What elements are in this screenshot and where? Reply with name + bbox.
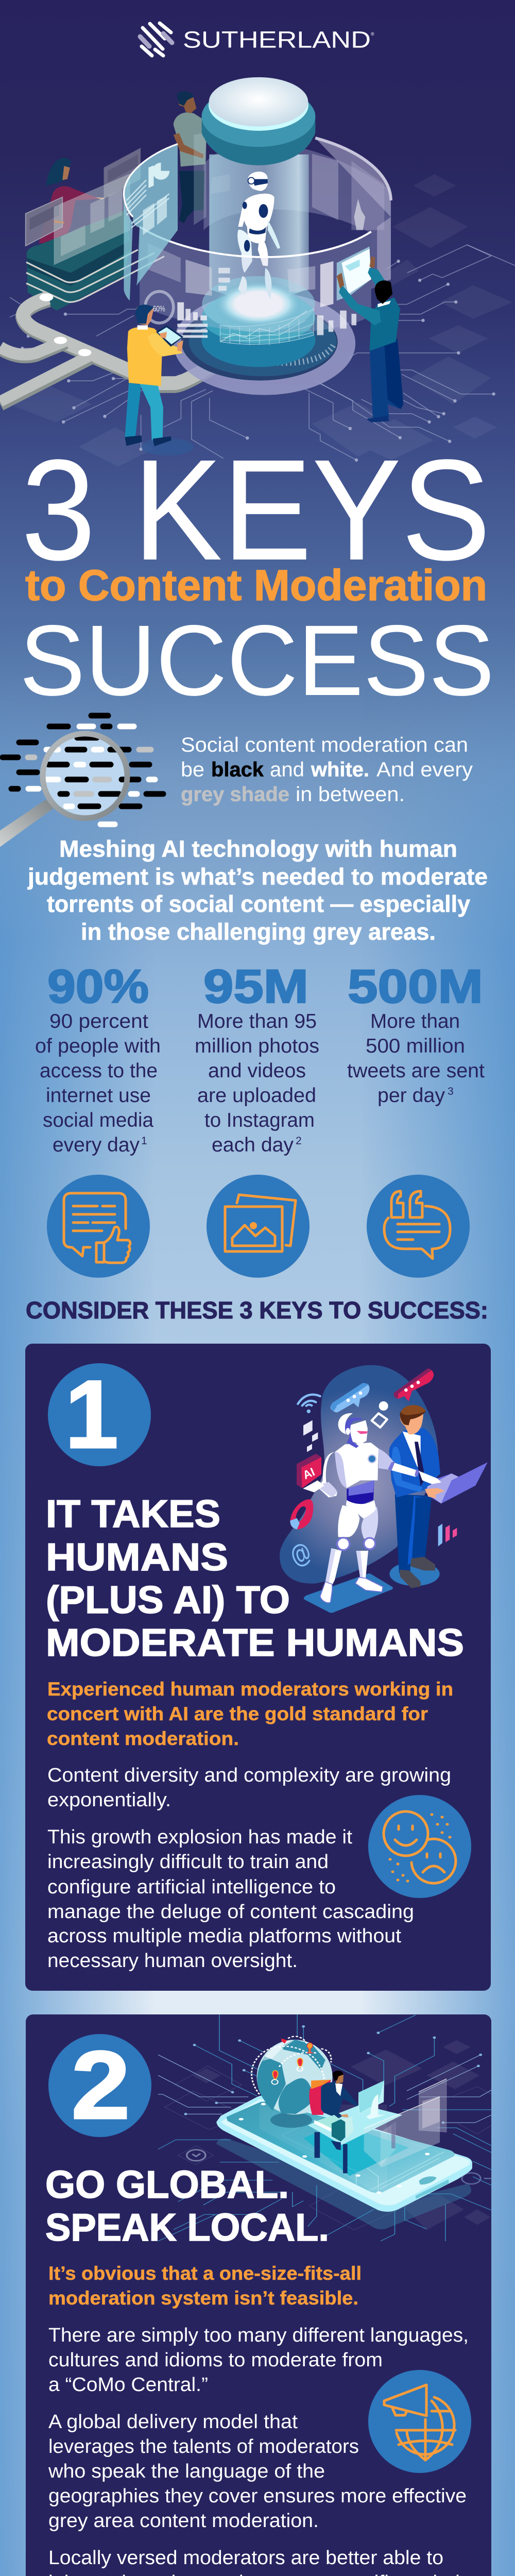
desk and moderator xyxy=(308,2105,402,2145)
stat: 90 percent: social media xyxy=(43,1109,153,1131)
stat: 90 percent: 90% xyxy=(47,960,149,1013)
orange lead text: moderation system isn’t feasible. xyxy=(48,2287,358,2309)
back panel ring xyxy=(203,138,391,289)
text block: meshing AI with human judgement: judgement is what’s needed to moderate xyxy=(27,863,488,890)
heading: SPEAK LOCAL. xyxy=(45,2206,329,2249)
heading: GO GLOBAL. xyxy=(45,2163,289,2206)
stat: 500M: 500 million xyxy=(366,1035,465,1057)
heading: IT TAKES xyxy=(46,1492,220,1535)
body text: configure artificial intelligence to xyxy=(47,1876,336,1898)
stat: 95M: and videos xyxy=(208,1060,306,1082)
stat: 500M: 3 xyxy=(448,1086,454,1097)
robot in cylinder xyxy=(237,172,280,273)
logo: Sutherland: SUTHERLAND xyxy=(183,27,371,53)
circuit background xyxy=(192,2040,490,2230)
body text: across multiple media platforms without xyxy=(47,1925,401,1947)
body text: geographies they cover ensures more effective xyxy=(48,2485,467,2507)
body text: manage the deluge of content cascading xyxy=(47,1901,414,1923)
text block: meshing AI with human judgement: in those challenging grey areas. xyxy=(81,919,436,945)
illustration: robot and businessman with laptop: AI xyxy=(301,1465,317,1482)
stat: 95M: 95M xyxy=(203,960,308,1013)
orange lead text: content moderation. xyxy=(47,1728,239,1749)
body text: necessary human oversight. xyxy=(47,1950,298,1972)
heading xyxy=(46,1492,464,1664)
stat: 90 percent: 1 xyxy=(141,1135,147,1147)
body text: A global delivery model that xyxy=(48,2411,298,2433)
left desk with woman xyxy=(26,148,164,311)
text block: meshing AI with human judgement: Meshing AI technology with human xyxy=(59,836,457,862)
hero illustration: AI robot in a glass cylinder with moderators xyxy=(0,77,515,467)
stat: 95M: 2 xyxy=(296,1135,302,1147)
body text: exponentially. xyxy=(47,1789,171,1811)
body text: increasingly difficult to train and xyxy=(47,1851,329,1873)
stat: 95M: each day xyxy=(212,1134,294,1156)
text block: social content moderation: in between. xyxy=(296,783,405,806)
orange lead text xyxy=(47,1679,453,1749)
stat: 500M xyxy=(347,960,485,1107)
number badge 1 xyxy=(48,1360,151,1468)
logo: Sutherland: ® xyxy=(371,31,374,37)
body text: This growth explosion has made it xyxy=(47,1826,352,1848)
stat: 95M: are uploaded xyxy=(197,1084,316,1107)
base rings xyxy=(174,291,355,395)
title: 3 KEYS: 3 KEYS xyxy=(21,430,491,590)
orange lead text: Experienced human moderators working in xyxy=(47,1679,453,1700)
body text: a “CoMo Central.” xyxy=(48,2374,208,2396)
phone xyxy=(216,2095,472,2212)
icon: megaphone and globe xyxy=(368,2370,471,2473)
circuit dots xyxy=(21,260,495,462)
stat: 90 percent: every day xyxy=(53,1134,140,1156)
holo screens xyxy=(419,2079,447,2132)
body text: grey area content moderation. xyxy=(48,2510,319,2532)
yellow sweater person xyxy=(125,304,194,455)
stat: 90 percent: internet use xyxy=(46,1084,151,1107)
body text xyxy=(47,1765,451,1972)
icon: happy and sad faces xyxy=(368,1795,471,1898)
front panel ring with dashboards: 60% xyxy=(153,305,165,314)
orange lead text: It’s obvious that a one-size-fits-all xyxy=(48,2263,362,2284)
text block: social content moderation: and xyxy=(270,758,304,781)
text block: social content moderation: black xyxy=(211,758,264,781)
number badge 2 xyxy=(48,2031,151,2139)
heading: (PLUS AI) TO xyxy=(46,1578,290,1621)
blue suit person, right xyxy=(337,256,403,422)
stat: 90 percent: of people with xyxy=(35,1035,161,1057)
gray shirt person xyxy=(174,91,207,225)
text block: meshing AI with human judgement: torrents of social content — especially xyxy=(47,891,470,917)
orange lead text: concert with AI are the gold standard for xyxy=(47,1703,428,1724)
number badge 1: 1 xyxy=(65,1360,118,1468)
stat: 500M: More than xyxy=(370,1010,460,1032)
icon: magnifier over black white and grey dashes xyxy=(0,716,163,847)
logo: Sutherland xyxy=(140,23,374,56)
illustration: robot and businessman with laptop xyxy=(280,1365,488,1613)
text block: social content moderation: white. xyxy=(311,758,369,781)
illustration: moderator at desk on giant phone with globe xyxy=(158,2014,492,2241)
body text: Content diversity and complexity are growing xyxy=(47,1765,451,1786)
title: SUCCESS: SUCCESS xyxy=(20,604,494,717)
body text: cultures and idioms to moderate from xyxy=(48,2349,383,2371)
stat: 500M: per day xyxy=(377,1084,445,1107)
stat: 95M xyxy=(195,960,319,1156)
heading xyxy=(45,2163,329,2249)
icon: comment and thumbs up xyxy=(47,1175,150,1278)
stat: 90 percent: access to the xyxy=(40,1060,158,1082)
panel: key 1 xyxy=(25,1344,491,1991)
icon: quote speech bubble xyxy=(367,1175,470,1278)
floor diamonds xyxy=(13,174,512,467)
stat: 500M: 500M xyxy=(348,960,483,1013)
orange lead text xyxy=(48,2263,362,2309)
body text: leverages the talents of moderators xyxy=(48,2436,359,2458)
panel: key 2 xyxy=(26,2014,492,2576)
circuit traces xyxy=(10,245,515,460)
heading: HUMANS xyxy=(46,1535,228,1579)
globe xyxy=(270,2112,312,2128)
holographic chart xyxy=(220,309,314,345)
number badge 2: 2 xyxy=(71,2031,130,2139)
body text xyxy=(48,2325,469,2576)
front panel ring with dashboards xyxy=(140,227,371,338)
illustration: robot and businessman with laptop: @ xyxy=(285,1536,316,1571)
stat: 90 percent: 90 percent xyxy=(49,1010,148,1032)
subtitle: to Content Moderation: to Content Moderation xyxy=(25,561,487,609)
icon: photo stack xyxy=(207,1175,310,1278)
body text: Locally versed moderators are better able to xyxy=(48,2547,443,2569)
text block: social content moderation: Social content moderation can xyxy=(181,734,468,756)
body text: who speak the language of the xyxy=(48,2461,325,2482)
left teal holo panel xyxy=(124,144,178,301)
stat: 95M: More than 95 xyxy=(197,1010,317,1032)
stat: 500M: tweets are sent xyxy=(347,1060,485,1082)
text block: social content moderation: be xyxy=(181,758,204,781)
stat: 95M: to Instagram xyxy=(204,1109,315,1131)
glass cylinder xyxy=(202,77,315,306)
text block: social content moderation xyxy=(181,734,473,806)
pipes xyxy=(0,298,217,404)
heading: MODERATE HUMANS xyxy=(46,1621,464,1664)
text block: meshing AI with human judgement xyxy=(27,836,488,945)
text block: social content moderation: And every xyxy=(376,758,473,781)
heading: consider these 3 keys: CONSIDER THESE 3 KEYS TO SUCCESS: xyxy=(26,1297,488,1324)
text block: social content moderation: grey shade xyxy=(181,783,289,806)
stat: 90 percent xyxy=(35,960,161,1156)
stat: 95M: million photos xyxy=(195,1035,319,1057)
body text: There are simply too many different languages, xyxy=(48,2325,469,2346)
robot platform glow xyxy=(202,268,315,332)
